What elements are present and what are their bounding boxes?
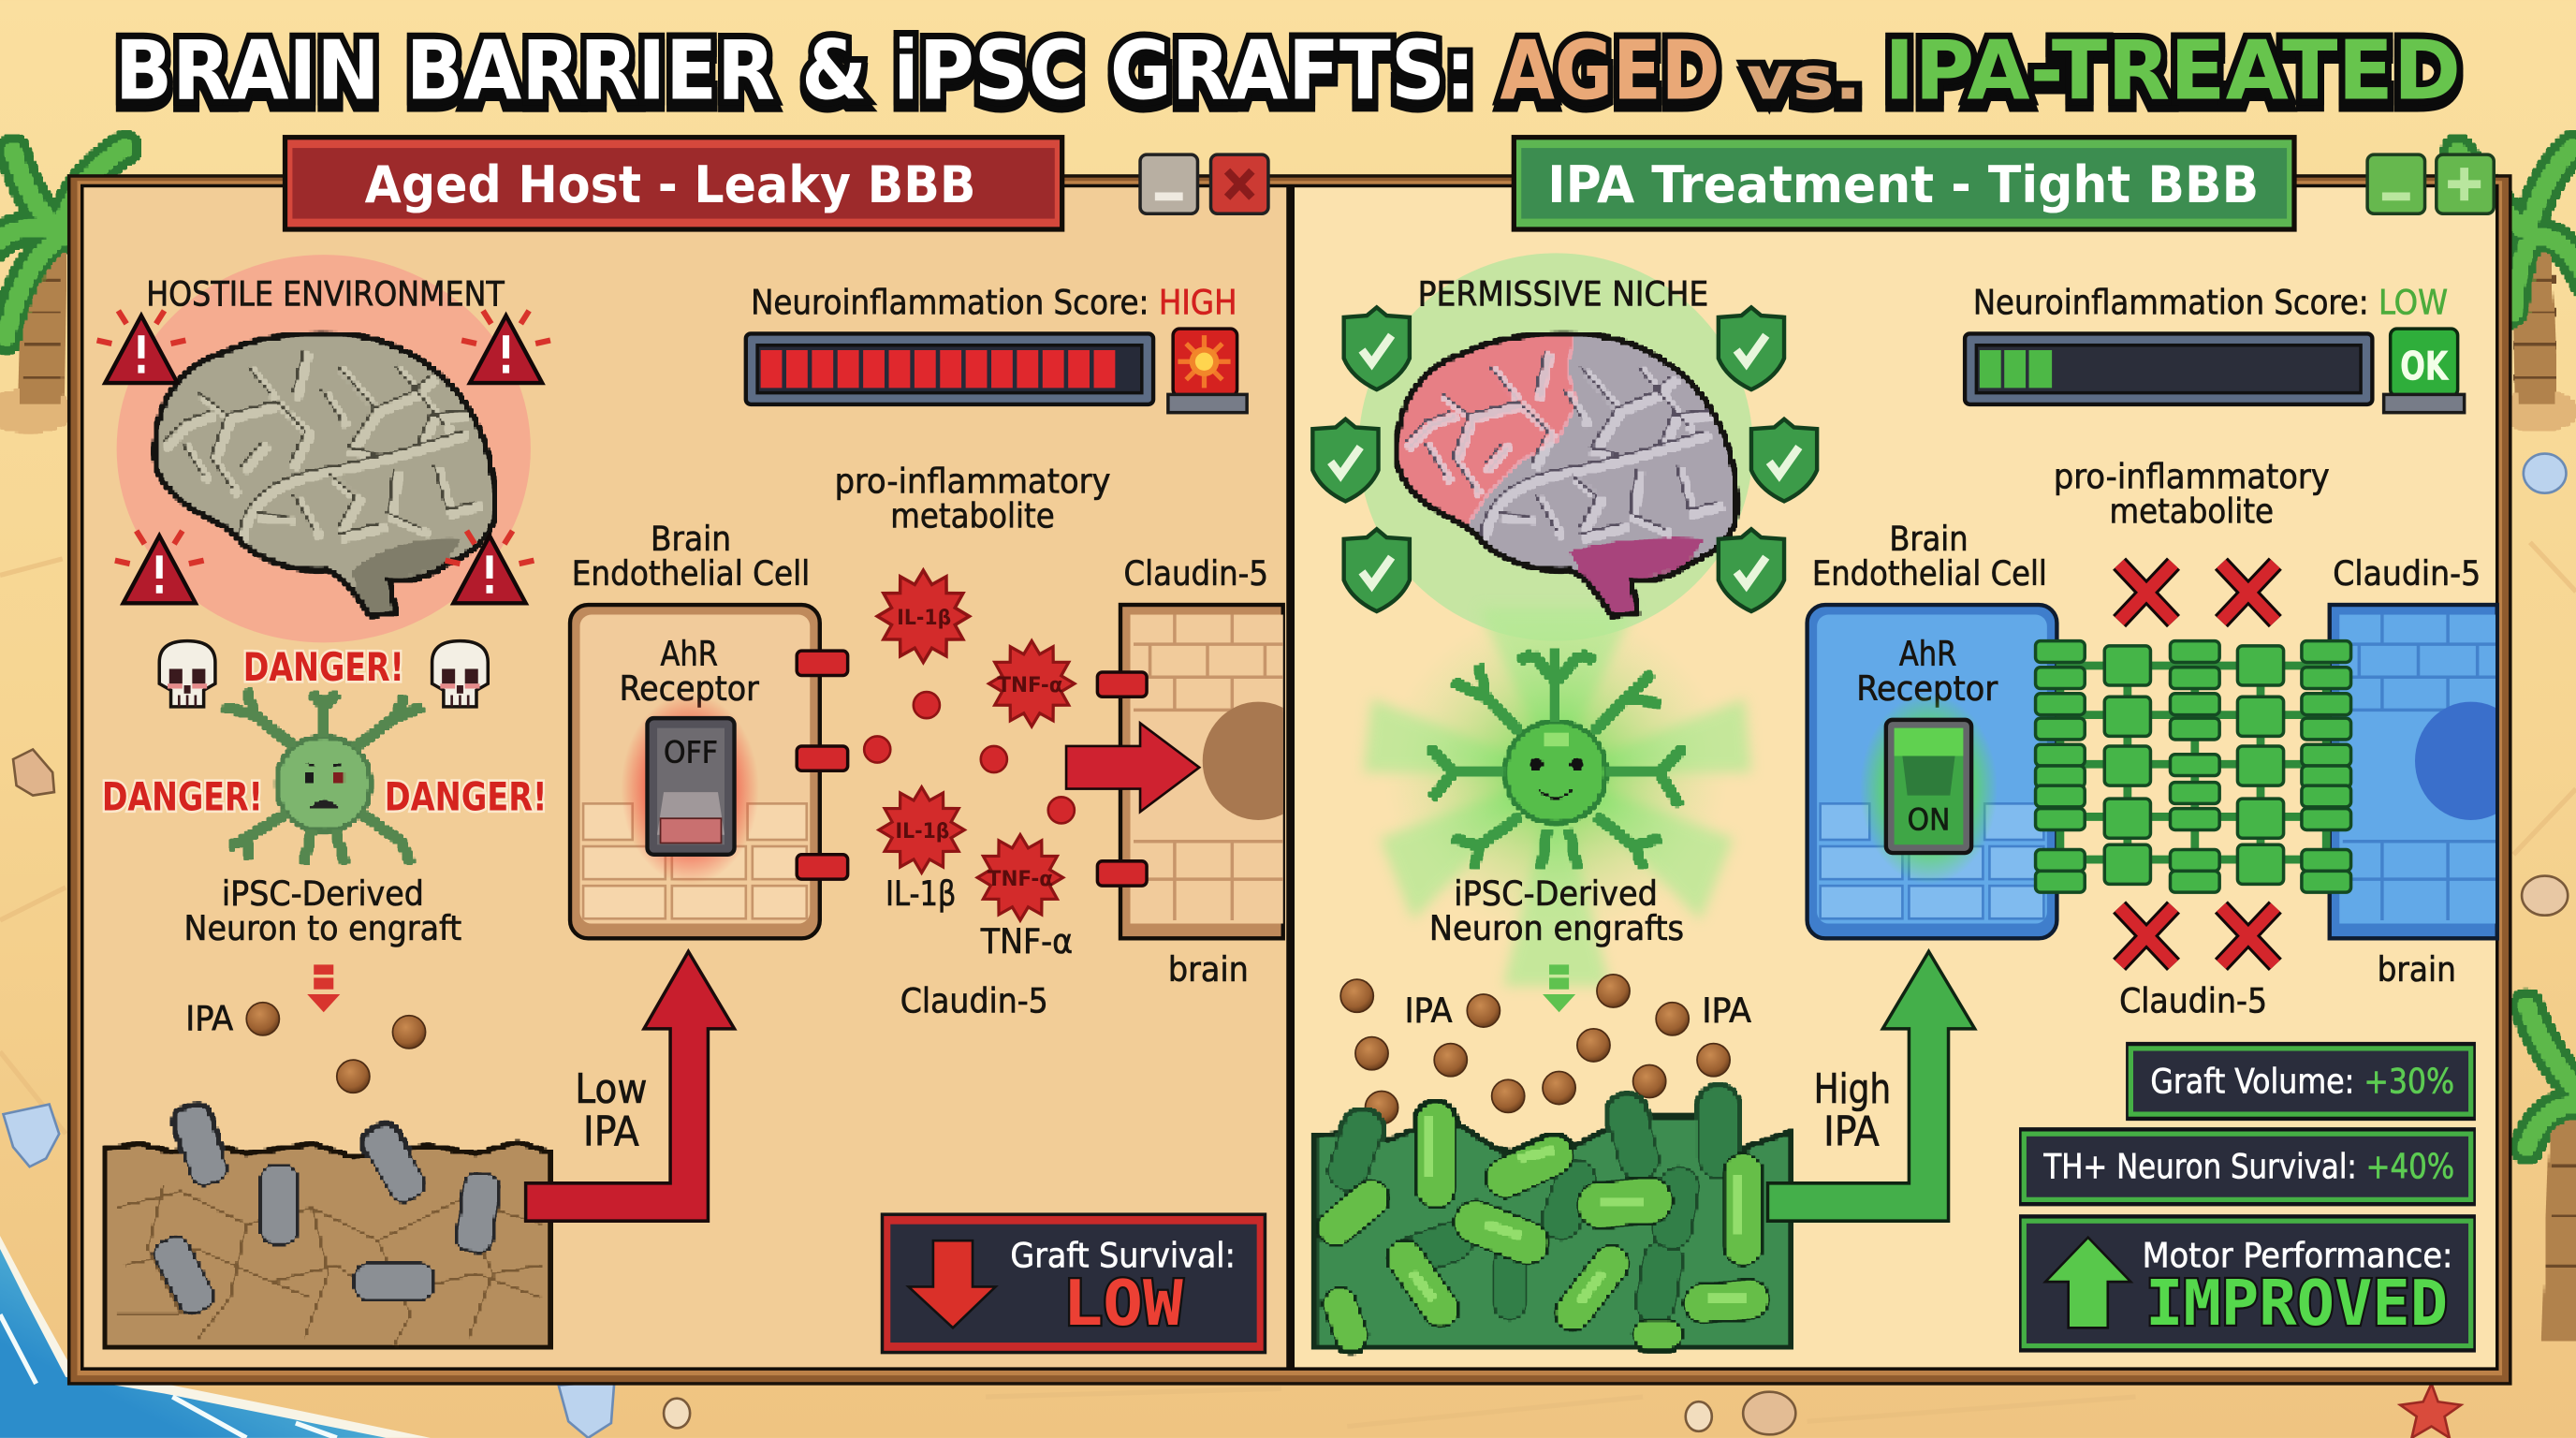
dashed arrow: down red	[307, 964, 340, 1012]
arrow: leak through barrier	[1066, 723, 1199, 812]
receptors on left cell	[797, 651, 848, 879]
neuroinflammation score: high: Neuroinflammation Score: HIGH	[751, 282, 1237, 322]
label: pro-inflammatory metabolite right	[2054, 456, 2330, 531]
title: AGED	[1500, 22, 1720, 118]
heading: hostile environment: HOSTILE ENVIRONMENT	[146, 274, 505, 315]
palm tree top right	[2458, 148, 2576, 431]
tight junction claudin-5 lattice	[2036, 641, 2351, 892]
label: high IPA	[1814, 1065, 1891, 1155]
label: pro-inflammatory metabolite left: pro-inflammatory	[835, 462, 1110, 502]
label: low IPA	[575, 1065, 648, 1155]
label: iPSC neuron engrafts: iPSC-Derived	[1454, 873, 1658, 914]
arrow: high IPA	[1767, 951, 1975, 1221]
main window frame	[69, 176, 2510, 1384]
label: low IPA: Low	[575, 1065, 648, 1113]
title: vs.	[1747, 43, 1862, 112]
label: iPSC neuron to engraft: Neuron to engraft	[184, 908, 461, 948]
label: high IPA: High	[1814, 1065, 1891, 1113]
switch: off	[621, 694, 759, 884]
metabolite dots	[864, 692, 1075, 823]
icon: healthy pink brain	[1390, 329, 1735, 615]
cytokines: IL-1β	[897, 607, 951, 630]
neuron: distressed	[224, 690, 422, 863]
danger labels	[102, 644, 547, 819]
label: iPSC neuron to engraft	[184, 873, 461, 948]
label: low IPA: IPA	[583, 1108, 639, 1155]
shells and starfish on the sand	[4, 454, 2568, 1438]
label: iPSC neuron to engraft: iPSC-Derived	[222, 873, 424, 914]
neuron glow rays	[1364, 609, 1751, 986]
label: pro-inflammatory metabolite right: metabolite	[2110, 491, 2274, 531]
endothelial cell left	[570, 605, 820, 938]
label: brain endothelial cell right	[1812, 519, 2047, 594]
healthy gut bacteria mat	[1310, 1086, 1789, 1356]
label: brain endothelial cell right: Endothelial Cell	[1812, 553, 2047, 594]
stat: graft volume	[2126, 1042, 2476, 1121]
label: high IPA: IPA	[1823, 1108, 1880, 1155]
icon: aged grey brain	[155, 335, 493, 615]
label: AhR receptor left: AhR	[661, 634, 718, 674]
callout: graft survival low	[882, 1214, 1265, 1353]
label: AhR receptor right: Receptor	[1856, 668, 1998, 709]
switch: off: OFF	[664, 737, 718, 770]
label: brain right: brain	[2378, 949, 2456, 990]
dashed arrow: down green	[1543, 964, 1575, 1012]
title: BRAIN BARRIER & iPSC GRAFTS:	[115, 22, 1475, 118]
siren: green OK	[2384, 329, 2465, 413]
heading: permissive niche: PERMISSIVE NICHE	[1418, 274, 1708, 315]
shield icons	[1312, 307, 1817, 611]
score bar low	[1965, 333, 2372, 404]
second cell left with nucleus	[1118, 603, 1285, 940]
arrow: low IPA	[526, 951, 735, 1221]
labels: IPA high	[1405, 990, 1751, 1031]
label: pro-inflammatory metabolite left	[835, 462, 1110, 536]
callout: motor performance improved	[2019, 1214, 2476, 1353]
label: AhR receptor right	[1856, 634, 1998, 709]
palm tree bottom right	[2526, 1005, 2576, 1340]
header: aged host	[283, 135, 1064, 232]
receptors on second cell left	[1097, 672, 1147, 886]
window buttons: aged host	[1140, 154, 1268, 213]
label: IPA low: IPA	[185, 999, 234, 1039]
danger labels: DANGER!	[243, 644, 404, 690]
stat: graft volume: Graft Volume: +30%	[2150, 1061, 2454, 1101]
left halo	[117, 255, 531, 642]
label: claudin-5 left bottom: Claudin-5	[900, 980, 1048, 1020]
label: AhR receptor left	[620, 634, 759, 709]
header: IPA treatment: IPA Treatment - Tight BBB	[1547, 155, 2259, 214]
callout: motor performance improved: IMPROVED	[2145, 1267, 2448, 1340]
label: brain endothelial cell right: Brain	[1889, 519, 1969, 559]
sea corner with foam	[0, 1236, 431, 1438]
label: claudin-5 left top: Claudin-5	[1123, 553, 1268, 594]
callout: motor performance improved: Motor Performance:	[2143, 1235, 2452, 1275]
switch: on	[1860, 694, 1998, 884]
barren soil with grey bacteria	[105, 1102, 549, 1346]
window buttons: IPA treatment	[2367, 154, 2494, 213]
cytokines: TNF-α	[988, 868, 1053, 891]
cytokine labels: IL-1β	[886, 873, 956, 914]
callout: graft survival low: Graft Survival:	[1010, 1235, 1236, 1275]
cytokine labels	[886, 873, 1073, 961]
cytokines: IL-1β	[896, 820, 949, 844]
second cell right with nucleus	[2327, 603, 2499, 940]
skull icons	[159, 641, 488, 707]
label: iPSC neuron engrafts	[1429, 873, 1684, 948]
label: claudin-5 right bottom: Claudin-5	[2119, 980, 2267, 1020]
label: brain endothelial cell left	[572, 519, 810, 594]
panel: IPA treatment background	[1295, 187, 2496, 1367]
title	[115, 22, 2461, 118]
right halo	[1358, 253, 1753, 641]
palm tree top left	[0, 148, 138, 433]
label: pro-inflammatory metabolite right: pro-inflammatory	[2054, 456, 2330, 496]
endothelial cell right	[1808, 605, 2056, 938]
cytokine labels: TNF-α	[980, 921, 1073, 961]
title: IPA-TREATED	[1884, 22, 2461, 118]
siren: green OK: OK	[2400, 344, 2449, 389]
sand ripples	[0, 542, 2576, 1427]
cytokines: TNF-α	[997, 674, 1063, 697]
neuroinflammation score: low: Neuroinflammation Score: LOW	[1973, 282, 2448, 322]
label: brain endothelial cell left: Endothelial Cell	[572, 553, 810, 594]
panel: aged host background	[84, 187, 1286, 1367]
labels: IPA high: IPA	[1405, 990, 1453, 1031]
callout: graft survival low: LOW	[1063, 1267, 1184, 1340]
header: aged host: Aged Host - Leaky BBB	[365, 155, 976, 214]
stat: TH+ neuron survival	[2019, 1127, 2476, 1206]
label: iPSC neuron engrafts: Neuron engrafts	[1429, 908, 1684, 948]
danger labels: DANGER!	[385, 773, 547, 819]
blocked metabolite X marks	[2119, 564, 2276, 964]
switch: on: ON	[1908, 803, 1950, 837]
score bar high	[746, 333, 1153, 404]
neuron: happy	[1429, 649, 1684, 868]
header: IPA treatment	[1512, 135, 2297, 232]
warning icons	[97, 311, 550, 603]
label: claudin-5 right top: Claudin-5	[2333, 553, 2481, 594]
label: AhR receptor right: AhR	[1899, 634, 1956, 674]
siren: red	[1168, 329, 1247, 413]
label: AhR receptor left: Receptor	[620, 668, 759, 709]
label: brain left: brain	[1168, 949, 1249, 990]
IPA balls high	[1340, 975, 1730, 1124]
labels: IPA high: IPA	[1702, 990, 1751, 1031]
label: pro-inflammatory metabolite left: metabolite	[890, 496, 1055, 536]
cytokines	[877, 570, 1075, 920]
stat: TH+ neuron survival: TH+ Neuron Survival: +40%	[2042, 1147, 2454, 1187]
IPA balls low	[246, 1003, 426, 1093]
danger labels: DANGER!	[102, 773, 263, 819]
label: brain endothelial cell left: Brain	[651, 519, 731, 559]
